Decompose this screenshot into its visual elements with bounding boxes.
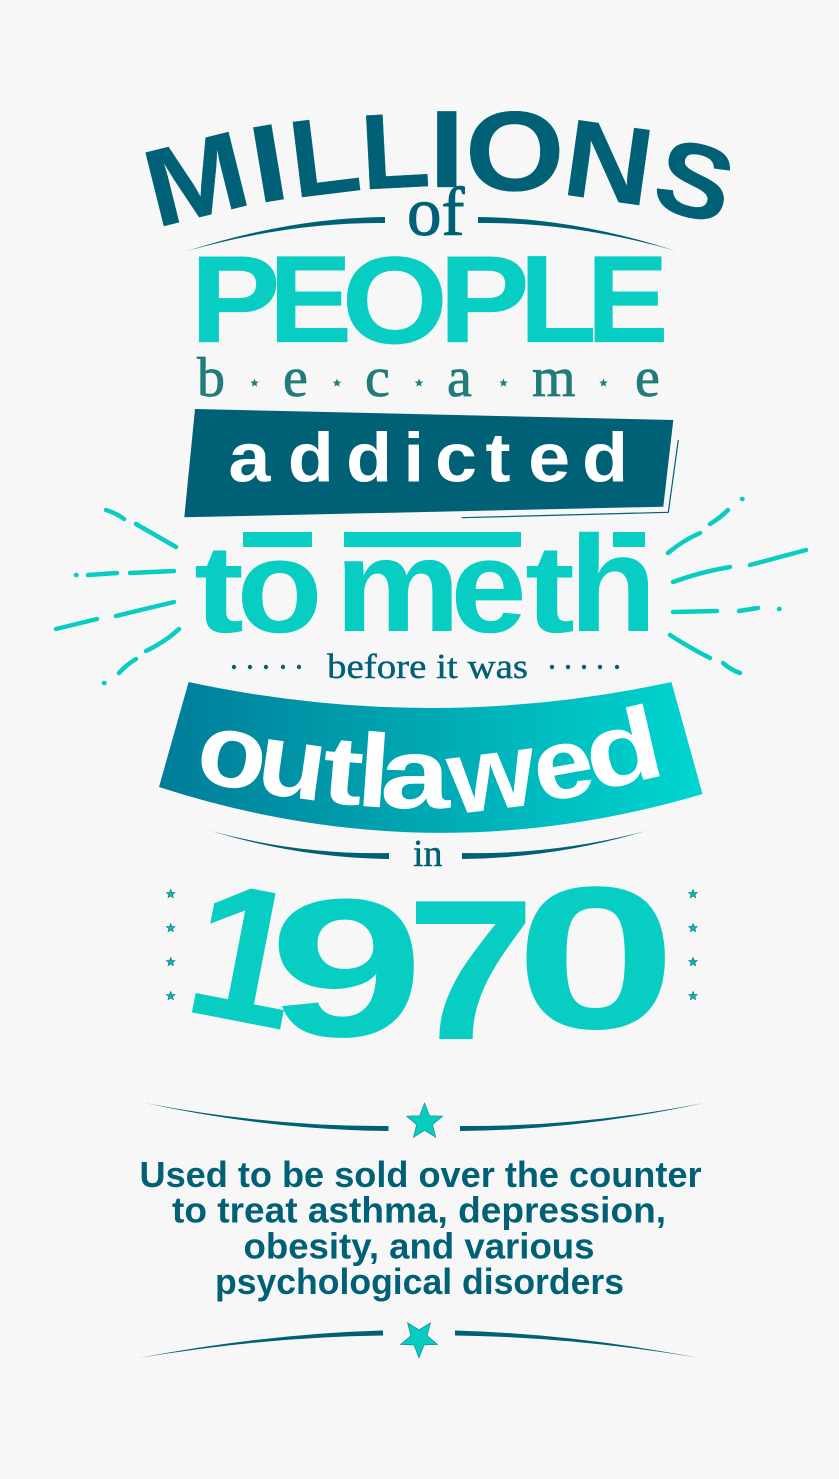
text: became: a <box>447 347 472 409</box>
curved divider: of left <box>187 217 385 251</box>
curved divider: upper left <box>145 1103 388 1131</box>
text: outlawed: a <box>380 718 451 830</box>
heading: to meth: t <box>525 520 575 659</box>
text: became: c <box>365 347 390 409</box>
heading: MILLIONS <box>132 87 746 251</box>
text: before it was: before it was <box>327 647 528 686</box>
heading: to meth: e <box>450 512 527 661</box>
heading: MILLIONS: O <box>465 87 565 215</box>
heading: to meth: o <box>236 513 323 661</box>
text: addicted: d <box>288 419 334 497</box>
text: in: in <box>413 833 443 875</box>
text: outlawed: t <box>318 715 368 827</box>
banner: outlawed <box>159 682 702 838</box>
icon: upper star <box>407 1103 443 1137</box>
text: addicted: d <box>582 419 628 497</box>
heading: to meth: m <box>335 511 460 659</box>
text: addicted: i <box>403 419 424 497</box>
text: addicted: e <box>528 419 570 497</box>
text: outlawed: e <box>523 704 602 824</box>
stars between became letters <box>250 378 608 387</box>
heading: 1970: 7 <box>406 858 536 1082</box>
curved divider: lower right <box>455 1330 699 1358</box>
heading: to meth <box>194 507 657 661</box>
text: became: e <box>283 347 308 409</box>
text: became: b <box>197 347 225 409</box>
dots right <box>550 665 619 669</box>
heading: MILLIONS: M <box>132 107 260 251</box>
heading: 1970: 0 <box>515 845 677 1072</box>
heading: PEOPLE: O <box>342 231 448 370</box>
banner: addicted <box>184 409 678 518</box>
text: became: e <box>635 347 660 409</box>
heading: PEOPLE <box>190 229 669 370</box>
rays: left burst <box>56 510 179 683</box>
rays: right burst <box>668 499 806 673</box>
heading: MILLIONS: L <box>282 91 366 221</box>
text block: description: to treat asthma, depression, <box>172 1190 666 1230</box>
heading: MILLIONS: S <box>643 115 746 248</box>
text block: description: obesity, and various <box>244 1226 594 1266</box>
heading: PEOPLE: P <box>439 230 530 369</box>
heading: MILLIONS: L <box>357 90 433 213</box>
curved divider: of right <box>478 217 676 251</box>
text: outlawed <box>189 684 673 838</box>
heading: MILLIONS: I <box>429 88 465 211</box>
text: outlawed: u <box>251 700 335 823</box>
text: addicted: c <box>435 419 477 497</box>
heading: of: of <box>407 174 464 250</box>
heading: MILLIONS: I <box>241 100 296 227</box>
heading: 1970: 9 <box>269 858 424 1078</box>
text: outlawed: d <box>572 684 673 813</box>
icon: lower star <box>400 1323 438 1358</box>
text block: description: psychological disorders <box>215 1261 624 1302</box>
heading: PEOPLE: L <box>519 229 597 369</box>
text block: description <box>140 1154 702 1302</box>
text: outlawed: o <box>189 689 277 815</box>
curved divider: in left <box>211 831 389 859</box>
stars left of 1970 <box>166 890 175 1000</box>
heading: to meth: t <box>194 520 244 659</box>
heading: PEOPLE: E <box>586 231 669 369</box>
heading: PEOPLE: E <box>269 230 352 369</box>
curved divider: upper right <box>460 1103 704 1131</box>
text: outlawed: w <box>440 709 543 838</box>
dots left <box>232 665 301 669</box>
text block: description: Used to be sold over the counter <box>140 1154 702 1195</box>
text: addicted: t <box>485 419 511 497</box>
curved divider: lower left <box>139 1330 383 1358</box>
text: addicted: a <box>228 419 271 497</box>
heading: 1970: 1 <box>172 838 319 1071</box>
text: became: m <box>532 347 576 409</box>
heading: 1970 <box>172 838 677 1082</box>
stars right of 1970 <box>689 890 697 1000</box>
curved divider: in right <box>462 831 646 859</box>
heading: MILLIONS: N <box>557 96 661 230</box>
heading: PEOPLE: P <box>190 230 281 369</box>
text: outlawed: l <box>353 711 395 830</box>
heading: to meth: h <box>569 507 657 660</box>
text: addicted: d <box>346 419 392 497</box>
